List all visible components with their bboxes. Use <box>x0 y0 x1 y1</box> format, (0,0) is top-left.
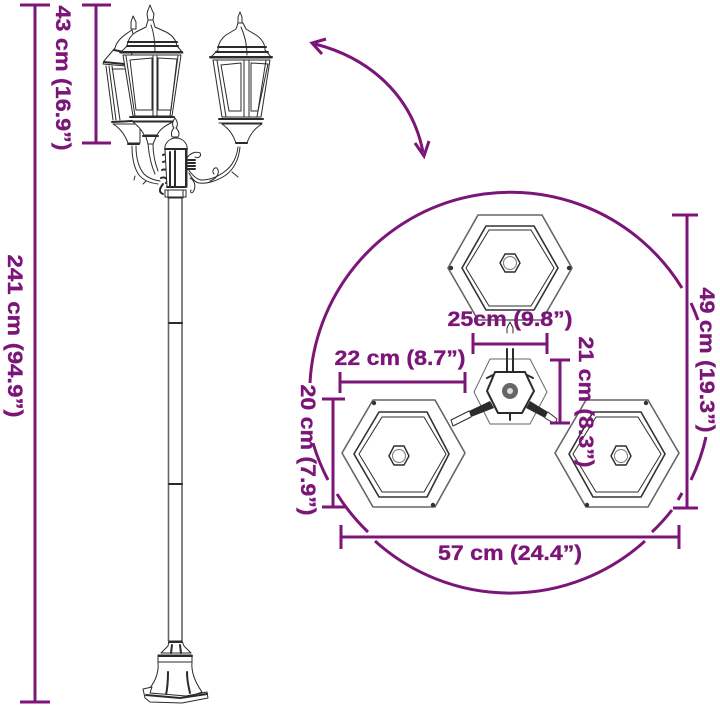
lantern: centre <box>120 5 183 174</box>
dimension: 20 cm <box>296 384 345 516</box>
label: 21 cm: 21 cm (8.3”) <box>574 336 597 468</box>
dimension: 22 cm <box>334 347 466 393</box>
top view: top lantern <box>448 215 572 320</box>
dimension: 57 cm <box>341 525 679 565</box>
dimension: total height 241 cm <box>3 5 50 702</box>
dimension: 21 cm <box>550 336 597 468</box>
dimension: 25 cm <box>448 308 572 354</box>
top view: right lantern <box>555 400 679 507</box>
label: 57 cm: 57 cm (24.4”) <box>438 542 582 565</box>
label: 20 cm: 20 cm (7.9”) <box>296 384 319 516</box>
dimension: 49 cm <box>672 215 718 508</box>
circle outline <box>310 192 706 593</box>
lantern: back left <box>103 16 160 184</box>
base <box>143 641 208 703</box>
label: 49 cm: 49 cm (19.3”) <box>695 288 718 432</box>
rotation arrow <box>312 39 429 156</box>
lamp post drawing <box>103 5 272 703</box>
label: 22 cm: 22 cm (8.7”) <box>334 347 466 370</box>
pole <box>168 190 183 641</box>
label: 25 cm: 25cm (9.8”) <box>448 308 572 331</box>
dimension: lantern height 43 cm <box>51 5 111 150</box>
top view: central hub with arms <box>451 322 557 426</box>
lantern: right <box>210 12 272 143</box>
lantern arms and scrolls <box>134 147 240 194</box>
central hub <box>165 118 187 197</box>
label: 241 cm: 241 cm (94.9”) <box>3 254 26 418</box>
top view: left lantern <box>342 400 465 507</box>
label: 43 cm: 43 cm (16.9”) <box>51 6 74 150</box>
